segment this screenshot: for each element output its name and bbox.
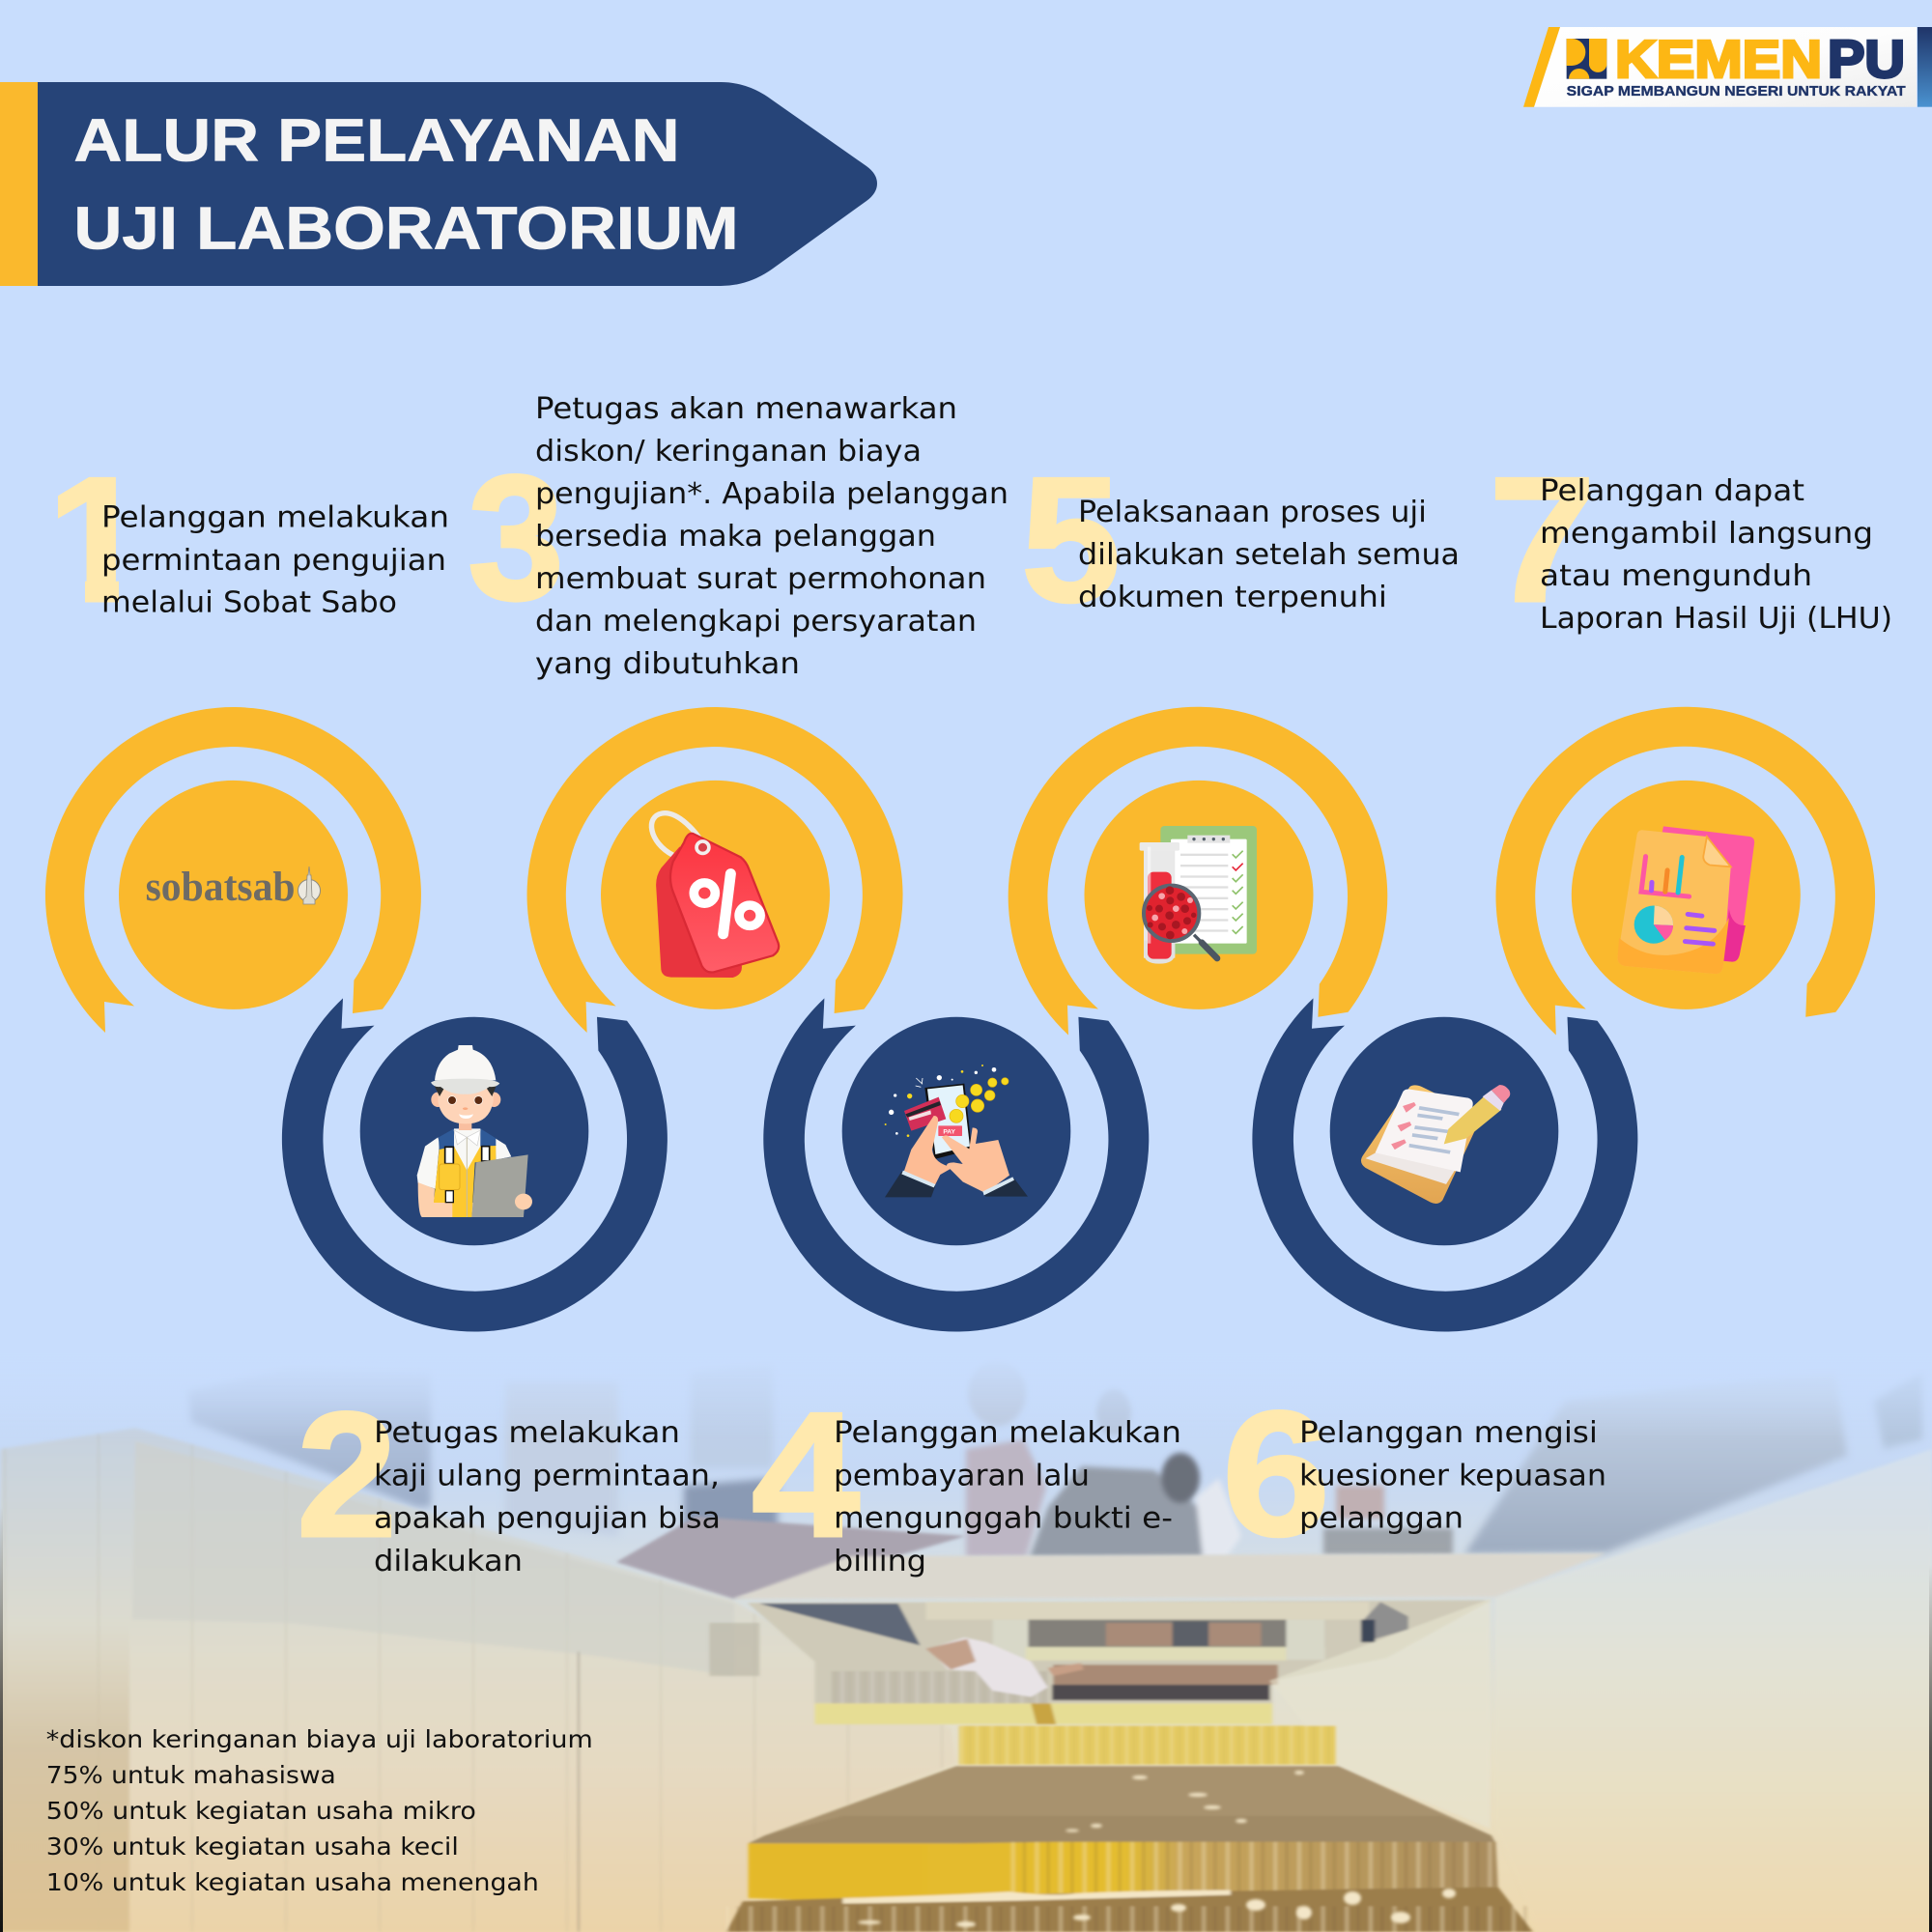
footnote: discount list (46, 1725, 593, 1896)
text: step 2: Petugas melakukan (374, 1416, 680, 1450)
icon: sobatsabo wordmark: sobatsab (146, 865, 296, 910)
text: step 4: pembayaran lalu (834, 1459, 1090, 1492)
text: step 1 (101, 500, 449, 620)
ring: step 4 (763, 998, 1149, 1332)
text: step 7: mengambil langsung (1540, 517, 1873, 551)
logo wordmark PU: PU (1828, 29, 1905, 89)
footnote: discount list: 30% untuk kegiatan usaha kecil (46, 1833, 459, 1861)
step number 7: 7 (1489, 440, 1596, 639)
text: step 2: apakah pengujian bisa (374, 1502, 721, 1536)
step number 6: 6 (1222, 1374, 1330, 1573)
logo tagline: SIGAP MEMBANGUN NEGERI UNTUK RAKYAT (1567, 83, 1906, 99)
text: step 3: pengujian*. Apabila pelanggan (535, 477, 1009, 511)
footnote: discount list: 75% untuk mahasiswa (46, 1761, 336, 1789)
footnote: discount list: *diskon keringanan biaya uji laboratorium (46, 1725, 593, 1753)
text: step 4: mengunggah bukti e- (834, 1502, 1173, 1536)
icon: test tube and checklist (1140, 826, 1257, 964)
background photo: laboratory flume (0, 1352, 1932, 1932)
logo: Kementerian PU (1523, 27, 1932, 107)
footnote: discount list: 10% untuk kegiatan usaha menengah (46, 1868, 539, 1896)
text: step 3: yang dibutuhkan (535, 647, 800, 681)
step number 3: 3 (468, 438, 564, 637)
text: step 4: billing (834, 1545, 926, 1578)
ring: step 3 (527, 707, 903, 1033)
text: step 2: kaji ulang permintaan, (374, 1459, 720, 1492)
text: step 5 (1078, 496, 1460, 614)
text: step 5: Pelaksanaan proses uji (1078, 496, 1427, 529)
text: step 6: kuesioner kepuasan (1299, 1459, 1606, 1492)
text: step 1: melalui Sobat Sabo (101, 586, 397, 620)
title text: ALUR PELAYANAN (73, 108, 680, 175)
icon: questionnaire and pencil (1361, 1085, 1510, 1204)
text: step 5: dilakukan setelah semua (1078, 538, 1460, 572)
text: step 3: Petugas akan menawarkan (535, 392, 957, 426)
title banner (0, 82, 877, 286)
text: step 5: dokumen terpenuhi (1078, 581, 1387, 614)
ring: step 1 (45, 707, 421, 1033)
text: step 3: bersedia maka pelanggan (535, 520, 936, 554)
ring: step 2 (282, 998, 668, 1332)
text: step 4: Pelanggan melakukan (834, 1416, 1181, 1450)
logo wordmark KEMEN: KEMEN (1615, 29, 1822, 89)
text: step 2 (374, 1416, 721, 1578)
step number 5: 5 (1021, 440, 1121, 639)
step number 1: 1 (43, 440, 150, 639)
text: step 7: Pelanggan dapat (1540, 474, 1804, 508)
text: step 7: Laporan Hasil Uji (LHU) (1540, 602, 1892, 636)
icon: phone payment: PAY (943, 1128, 955, 1135)
text: step 2: dilakukan (374, 1545, 523, 1578)
text: step 7 (1540, 474, 1892, 636)
text: step 4 (834, 1416, 1181, 1578)
text: step 1: permintaan pengujian (101, 544, 446, 578)
ring: step 6 (1252, 998, 1637, 1332)
text: step 6: Pelanggan mengisi (1299, 1416, 1598, 1450)
icon: discount tag (651, 813, 779, 978)
text: step 1: Pelanggan melakukan (101, 500, 449, 535)
step number 2: 2 (297, 1375, 397, 1574)
text: step 3: diskon/ keringanan biaya (535, 435, 922, 469)
text: step 6: pelanggan (1299, 1502, 1463, 1536)
icon: lab result report (1618, 826, 1754, 974)
title text (73, 108, 738, 263)
text: step 6 (1299, 1416, 1606, 1536)
text: step 7: atau mengunduh (1540, 559, 1812, 593)
icon: phone payment (885, 1065, 1028, 1197)
ring: step 5 (1009, 707, 1387, 1036)
icon: engineer with clipboard (417, 1045, 532, 1217)
ring: step 7 (1495, 707, 1875, 1036)
text: step 3 (535, 392, 1009, 681)
footnote: discount list: 50% untuk kegiatan usaha mikro (46, 1797, 476, 1825)
title text: UJI LABORATORIUM (73, 195, 738, 263)
step number 4: 4 (752, 1375, 860, 1574)
text: step 3: dan melengkapi persyaratan (535, 605, 977, 639)
icon: PU emblem (1567, 39, 1606, 79)
text: step 3: membuat surat permohonan (535, 562, 986, 596)
